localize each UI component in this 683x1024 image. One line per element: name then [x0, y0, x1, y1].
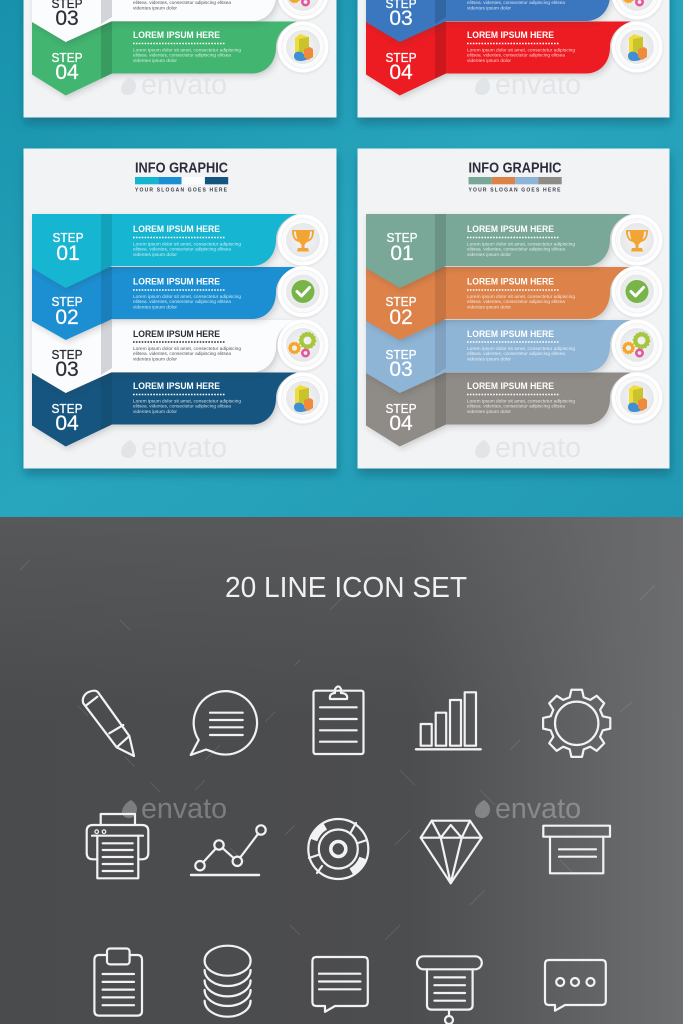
row: step 04 grey: elitsea. videntes, consectetur adipiscing elitsea: [467, 404, 565, 409]
icon: gears disc: [612, 0, 662, 20]
icon: line chart: [191, 825, 266, 875]
row: step 04 navy: videntes ipsum dolor: [133, 409, 177, 414]
row: step 04 red: STEP: [386, 50, 416, 65]
icon: gears disc: [278, 0, 328, 20]
row: step 04 grey: Lorem ipsum dolor sit amet, consectetur adipiscing: [467, 398, 575, 404]
row: step 01 cyan: 01: [56, 242, 80, 265]
row: step 01 sage: LOREM IPSUM HERE: [467, 224, 554, 234]
panel: bottom-left card (blue variant): [24, 149, 336, 468]
row: step 03 white: [32, 0, 297, 42]
row: step 03 light blue: [366, 320, 631, 393]
icon: message lines: [312, 957, 368, 1012]
row: step 03 blue: [366, 0, 631, 42]
watermark: envato top-left: envato: [141, 69, 227, 101]
icon: chat dots: [545, 960, 606, 1011]
row: step 02 orange: 02: [389, 306, 413, 329]
icon: chart disc: [612, 22, 662, 72]
row: step 04 navy: STEP: [52, 401, 82, 416]
icon: projector screen: [417, 956, 482, 1024]
row: step 01 sage: [366, 214, 631, 288]
heading: info graphic: INFO GRAPHIC: [468, 160, 562, 176]
colour key bar: [468, 177, 562, 184]
row: step 03 white: videntes ipsum dolor: [133, 356, 177, 362]
row: step 02 orange: STEP: [386, 294, 416, 309]
icon: check disc: [612, 266, 662, 317]
row: step 02 blue: Lorem ipsum dolor sit amet, consectetur adipiscing: [133, 294, 241, 299]
row: step 04 green: [32, 22, 297, 96]
row: step 04 red: [366, 22, 631, 96]
watermark: envato bottom-right: envato: [495, 432, 581, 464]
teal background panel: [0, 0, 683, 517]
colour key bar: [135, 177, 228, 184]
row: step 03 blue: 03: [389, 7, 413, 30]
row: step 02 blue: STEP: [52, 294, 82, 309]
icon: gears disc: [612, 320, 662, 370]
icon: archive box: [543, 826, 610, 873]
icon: trophy disc: [278, 214, 328, 266]
row: step 04 red: videntes ipsum dolor: [467, 58, 511, 63]
panel: dark icon set: [0, 517, 683, 1024]
row: step 04 red: LOREM IPSUM HERE: [467, 30, 554, 40]
row: step 04 grey: 04: [389, 412, 413, 435]
row: step 02 orange: elitsea. videntes, consectetur adipiscing elitsea: [467, 299, 565, 304]
row: step 04 green: 04: [55, 61, 79, 84]
row: step 02 blue: videntes ipsum dolor: [133, 304, 177, 310]
row: step 01 cyan: LOREM IPSUM HERE: [133, 224, 220, 234]
row: step 03 white: elitsea. videntes, consectetur adipiscing elitsea: [133, 0, 231, 5]
watermark: envato bottom-left: envato: [141, 432, 227, 464]
row: step 03 white: STEP: [52, 347, 82, 362]
panel: top-left card (green variant): [24, 0, 336, 117]
row: step 01 cyan: videntes ipsum dolor: [133, 252, 177, 257]
icon: chart disc: [278, 22, 328, 72]
row: step 01 sage: STEP: [386, 230, 418, 245]
row: step 04 green: LOREM IPSUM HERE: [133, 30, 220, 40]
heading: 20 line icon set: 20 LINE ICON SET: [225, 572, 467, 604]
row: step 02 orange: [366, 267, 631, 340]
row: step 04 grey: STEP: [386, 401, 416, 416]
heading: info graphic: INFO GRAPHIC: [135, 160, 228, 176]
icon: speech bubble: [191, 691, 257, 755]
row: step 03 white: elitsea. videntes, consectetur adipiscing elitsea: [133, 351, 231, 356]
row: step 03 light blue: STEP: [386, 347, 416, 362]
row: step 04 green: elitsea. videntes, consectetur adipiscing elitsea: [133, 53, 231, 58]
icon: gear: [543, 690, 610, 757]
row: step 01 sage: elitsea. videntes, consectetur adipiscing elitsea: [467, 247, 565, 252]
row: step 04 navy: elitsea. videntes, consectetur adipiscing elitsea: [133, 404, 231, 409]
row: step 03 white: 03: [55, 7, 79, 30]
row: step 03 blue: videntes ipsum dolor: [467, 6, 511, 10]
icon: clipboard list: [94, 948, 142, 1016]
slogan: YOUR SLOGAN GOES HERE: [468, 188, 561, 194]
icon: chart disc: [612, 372, 662, 424]
row: step 04 navy: 04: [55, 412, 79, 435]
row: step 03 white: Lorem ipsum dolor sit amet, consectetur adipiscing: [133, 346, 241, 351]
row: step 03 light blue: videntes ipsum dolor: [467, 356, 511, 362]
slogan: YOUR SLOGAN GOES HERE: [135, 188, 228, 194]
icon: printer: [87, 814, 148, 878]
row: step 02 blue: elitsea. videntes, consectetur adipiscing elitsea: [133, 299, 231, 304]
icon: check disc: [278, 266, 328, 317]
panel: bottom-right card (muted variant): [358, 149, 669, 468]
row: step 04 grey: [366, 372, 631, 446]
icon: clipboard: [314, 686, 364, 754]
icon: diamond: [421, 821, 482, 883]
row: step 04 green: STEP: [52, 50, 82, 65]
icon: pencil: [83, 691, 134, 756]
row: step 03 light blue: 03: [389, 358, 413, 381]
row: step 03 light blue: elitsea. videntes, consectetur adipiscing elitsea: [467, 351, 565, 356]
row: step 04 navy: Lorem ipsum dolor sit amet, consectetur adipiscing: [133, 398, 241, 404]
row: step 01 sage: 01: [390, 242, 414, 265]
icon: bar chart: [416, 692, 481, 749]
row: step 03 light blue: LOREM IPSUM HERE: [467, 329, 554, 339]
row: step 01 sage: Lorem ipsum dolor sit amet, consectetur adipiscing: [467, 242, 575, 246]
row: step 03 blue: elitsea. videntes, consectetur adipiscing elitsea: [467, 0, 565, 5]
row: step 03 white: 03: [55, 358, 79, 381]
watermark: envato dark left: envato: [141, 793, 227, 825]
row: step 03 white: videntes ipsum dolor: [133, 6, 177, 10]
icon: trophy disc: [612, 214, 662, 266]
row: step 01 cyan: elitsea. videntes, consectetur adipiscing elitsea: [133, 247, 231, 252]
row: step 02 blue: 02: [55, 306, 79, 329]
row: step 04 grey: LOREM IPSUM HERE: [467, 381, 554, 391]
row: step 02 orange: LOREM IPSUM HERE: [467, 276, 554, 286]
row: step 04 red: 04: [389, 61, 413, 84]
row: step 03 white: LOREM IPSUM HERE: [133, 329, 220, 339]
row: step 04 grey: videntes ipsum dolor: [467, 409, 511, 414]
row: step 02 orange: Lorem ipsum dolor sit amet, consectetur adipiscing: [467, 294, 575, 299]
icon: chip target: [308, 819, 368, 879]
icon: database stack: [205, 946, 251, 1017]
row: step 04 red: elitsea. videntes, consectetur adipiscing elitsea: [467, 53, 565, 58]
row: step 04 navy: LOREM IPSUM HERE: [133, 381, 220, 391]
row: step 03 white: [32, 320, 297, 393]
watermark: envato dark right: envato: [495, 793, 581, 825]
row: step 01 cyan: STEP: [52, 230, 84, 245]
row: step 02 blue: LOREM IPSUM HERE: [133, 276, 220, 286]
row: step 02 orange: videntes ipsum dolor: [467, 304, 511, 310]
row: step 04 red: Lorem ipsum dolor sit amet, consectetur adipiscing: [467, 48, 575, 52]
row: step 04 green: videntes ipsum dolor: [133, 58, 177, 63]
row: step 02 blue: [32, 267, 297, 340]
row: step 01 cyan: Lorem ipsum dolor sit amet, consectetur adipiscing: [133, 242, 241, 246]
row: step 04 green: Lorem ipsum dolor sit amet, consectetur adipiscing: [133, 48, 241, 52]
row: step 03 light blue: Lorem ipsum dolor sit amet, consectetur adipiscing: [467, 346, 575, 351]
row: step 01 cyan: [32, 214, 297, 288]
panel: top-right card (red variant): [358, 0, 669, 117]
watermark: envato top-right: envato: [495, 69, 581, 101]
row: step 04 navy: [32, 372, 297, 446]
icon: chart disc: [278, 372, 328, 424]
icon: gears disc: [278, 320, 328, 370]
row: step 01 sage: videntes ipsum dolor: [467, 252, 511, 257]
